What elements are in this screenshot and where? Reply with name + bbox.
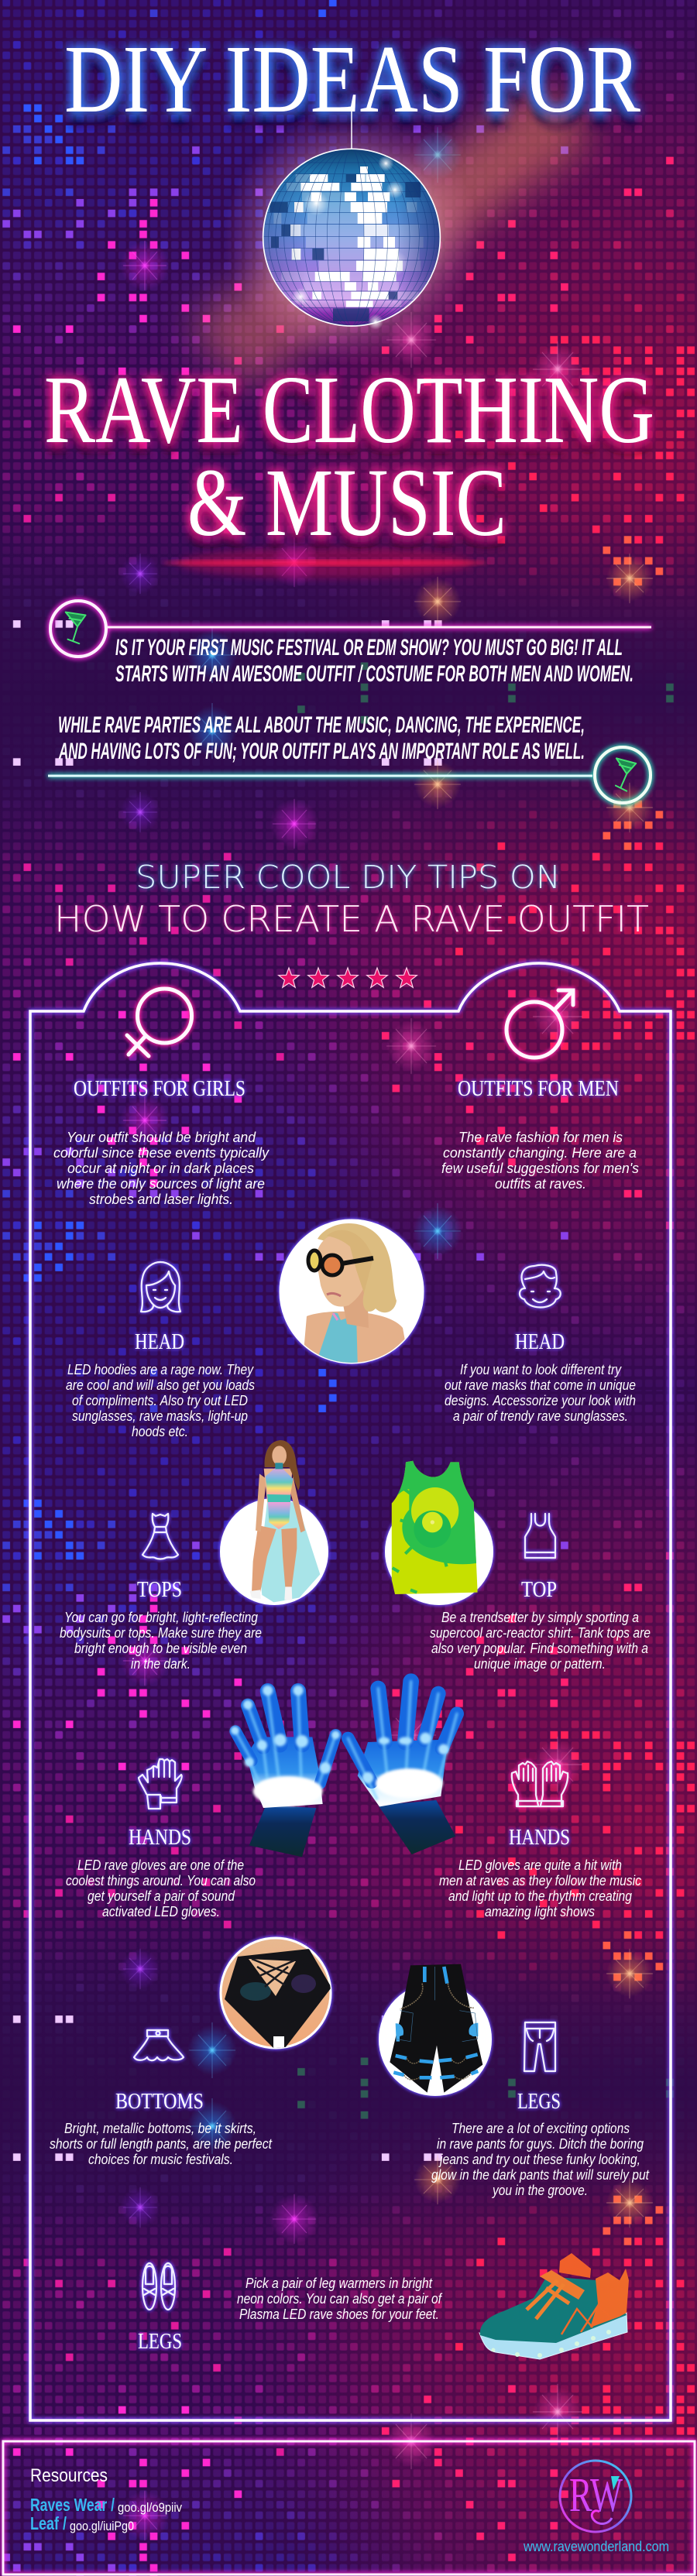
photo: holographic bottoms — [221, 1938, 331, 2049]
paragraph: If you want to look different try — [460, 1362, 622, 1377]
heading: TOPS — [137, 1577, 182, 1602]
panel: head for girls — [66, 1262, 255, 1439]
paragraph: strobes and laser lights. — [89, 1192, 233, 1207]
paragraph — [445, 1362, 636, 1424]
resource link 1: Raves Wear / — [30, 2495, 115, 2515]
paragraph: also very popular. Find something with a — [431, 1641, 648, 1656]
paragraph: few useful suggestions for men's — [441, 1161, 639, 1176]
right glove — [348, 1682, 457, 1854]
intro text 2 — [58, 712, 585, 764]
paragraph — [439, 1857, 641, 1919]
box border — [3, 2441, 695, 2574]
heading: HEAD — [135, 1329, 184, 1354]
paragraph — [441, 1130, 639, 1192]
panel: outfits for girls intro — [53, 1076, 270, 1207]
paragraph: activated LED gloves. — [102, 1904, 220, 1919]
paragraph: colorful since these events typically — [53, 1145, 270, 1161]
panel: outfits for men intro — [441, 1076, 639, 1192]
paragraph: in the dark. — [131, 1656, 191, 1672]
paragraph: There are a lot of exciting options — [452, 2121, 630, 2136]
paragraph: out rave masks that come in unique — [445, 1377, 636, 1393]
paragraph: hoods etc. — [132, 1424, 188, 1439]
paragraph — [430, 1610, 651, 1672]
photo: LED shoe — [479, 2253, 629, 2359]
paragraph: supercool arc-reactor shirt. Tank tops are — [430, 1625, 651, 1641]
paragraph — [53, 1130, 270, 1207]
paragraph: where the only sources of light are — [57, 1176, 265, 1192]
paragraph — [66, 1362, 255, 1439]
icon: pants — [524, 2022, 555, 2071]
icon: girl head — [141, 1262, 180, 1312]
icon: female symbol — [127, 989, 192, 1056]
paragraph: LED gloves are quite a hit with — [458, 1857, 622, 1873]
icon: gloves — [139, 1759, 182, 1809]
panel: resources box — [3, 2441, 695, 2574]
panel: head for men — [445, 1265, 636, 1424]
panel: bottoms for girls — [50, 2030, 273, 2167]
paragraph — [50, 2121, 273, 2167]
intro text 1 — [115, 635, 633, 687]
five stars — [279, 968, 417, 987]
title: & MUSIC: & MUSIC — [187, 450, 506, 557]
photo: black pants with blue straps — [379, 1964, 491, 2095]
resource link 2 — [30, 2513, 134, 2533]
paragraph: sunglasses, rave masks, light-up — [72, 1408, 248, 1424]
paragraph: and light up to the rhythm creating — [448, 1888, 632, 1904]
paragraph: designs. Accessorize your look with — [445, 1393, 636, 1408]
logo: RW — [560, 2461, 631, 2532]
neon ring and line with martini — [50, 601, 651, 657]
paragraph: choices for music festivals. — [88, 2152, 233, 2167]
icon: man head — [520, 1265, 561, 1307]
paragraph: of compliments. Also try out LED — [72, 1393, 248, 1408]
paragraph: you in the groove. — [491, 2183, 588, 2198]
paragraph: in rave pants for guys. Ditch the boring — [437, 2136, 644, 2152]
logo: RW: RW — [569, 2469, 623, 2522]
paragraph: get yourself a pair of sound — [88, 1888, 235, 1904]
icon: skirt — [134, 2030, 184, 2060]
intro block 1 — [50, 601, 651, 687]
photo: woman in rave bodysuit — [221, 1440, 328, 1604]
heading: TOP — [521, 1577, 557, 1602]
panel: hands for men — [439, 1761, 641, 1919]
heading: BOTTOMS — [115, 2089, 204, 2114]
light beam and glow behind disco ball — [163, 85, 596, 578]
paragraph: bright enough to be visible even — [74, 1641, 247, 1656]
paragraph: You can go for bright, light-reflecting — [64, 1610, 258, 1625]
panel: tops for girls — [60, 1514, 262, 1672]
paragraph: neon colors. You can also get a pair of — [237, 2291, 443, 2307]
subtitle: how to create a rave outfit: HOW TO CREATE A RAVE OUTFIT — [54, 898, 649, 940]
heading: HEAD — [515, 1329, 565, 1354]
panel: outfits frame with arches — [30, 963, 671, 2420]
paragraph: The rave fashion for men is — [458, 1130, 623, 1145]
paragraph: jeans and try out these funky looking, — [438, 2152, 640, 2167]
icon: male symbol — [506, 990, 573, 1058]
paragraph: coolest things around. You can also — [66, 1873, 256, 1888]
paragraph: Pick a pair of leg warmers in bright — [245, 2276, 433, 2291]
resource link 2: Leaf / — [30, 2513, 67, 2533]
icon: pair of gloves — [512, 1761, 568, 1806]
paragraph: occur at night or in dark places — [67, 1161, 254, 1176]
paragraph — [66, 1857, 256, 1919]
neon line and ring with martini — [48, 747, 651, 803]
paragraph: outfits at raves. — [495, 1176, 586, 1192]
paragraph: Be a trendsetter by simply sporting a — [441, 1610, 639, 1625]
paragraph: constantly changing. Here are a — [443, 1145, 637, 1161]
panel: hands for girls — [66, 1759, 256, 1919]
heading: OUTFITS FOR GIRLS — [74, 1076, 245, 1101]
paragraph: bodysuits or tops. Make sure they are — [60, 1625, 262, 1641]
resource link 1: goo.gl/o9piiv — [118, 2500, 182, 2515]
icon: pair of shoes — [142, 2263, 175, 2310]
paragraph: shorts or full length pants, are the perfect — [50, 2136, 273, 2152]
resources heading: Resources — [30, 2465, 108, 2486]
panel: legs for men — [431, 2022, 650, 2198]
paragraph: Your outfit should be bright and — [67, 1130, 256, 1145]
icon: dress — [142, 1514, 178, 1559]
heading: OUTFITS FOR MEN — [458, 1076, 619, 1101]
photo: tie-dye tank top — [386, 1458, 493, 1604]
paragraph: Plasma LED rave shoes for your feet. — [239, 2307, 439, 2322]
panel: top for men — [430, 1514, 651, 1672]
icon: tank top — [525, 1514, 555, 1558]
paragraph — [431, 2121, 650, 2198]
photo: LED gloves — [231, 1682, 457, 1857]
paragraph: a pair of trendy rave sunglasses. — [453, 1408, 628, 1424]
heading: HANDS — [129, 1825, 191, 1850]
paragraph: glow in the dark pants that will surely put — [431, 2167, 650, 2183]
paragraph: unique image or pattern. — [474, 1656, 606, 1672]
heading: HANDS — [509, 1825, 570, 1850]
photo: woman with glasses — [280, 1220, 423, 1370]
heading: LEGS — [517, 2089, 561, 2114]
heading: LEGS — [138, 2329, 182, 2354]
paragraph: LED rave gloves are one of the — [77, 1857, 244, 1873]
paragraph — [237, 2276, 443, 2322]
left glove — [231, 1686, 340, 1857]
paragraph: LED hoodies are a rage now. They — [67, 1362, 254, 1377]
paragraph — [60, 1610, 262, 1672]
panel: legs for girls — [138, 2263, 443, 2354]
icon: disco ball — [256, 111, 448, 330]
resource link 2: goo.gl/iuiPg0 — [70, 2519, 134, 2533]
subtitle: super cool DIY tips: SUPER COOL DIY TIPS ON — [136, 859, 561, 896]
paragraph: Bright, metallic bottoms, be it skirts, — [64, 2121, 256, 2136]
intro block 2 — [48, 712, 651, 803]
paragraph: amazing light shows — [485, 1904, 595, 1919]
website url: www.ravewonderland.com — [523, 2539, 669, 2554]
paragraph: are cool and will also get you loads — [66, 1377, 255, 1393]
paragraph: men at raves as they follow the music — [439, 1873, 641, 1888]
